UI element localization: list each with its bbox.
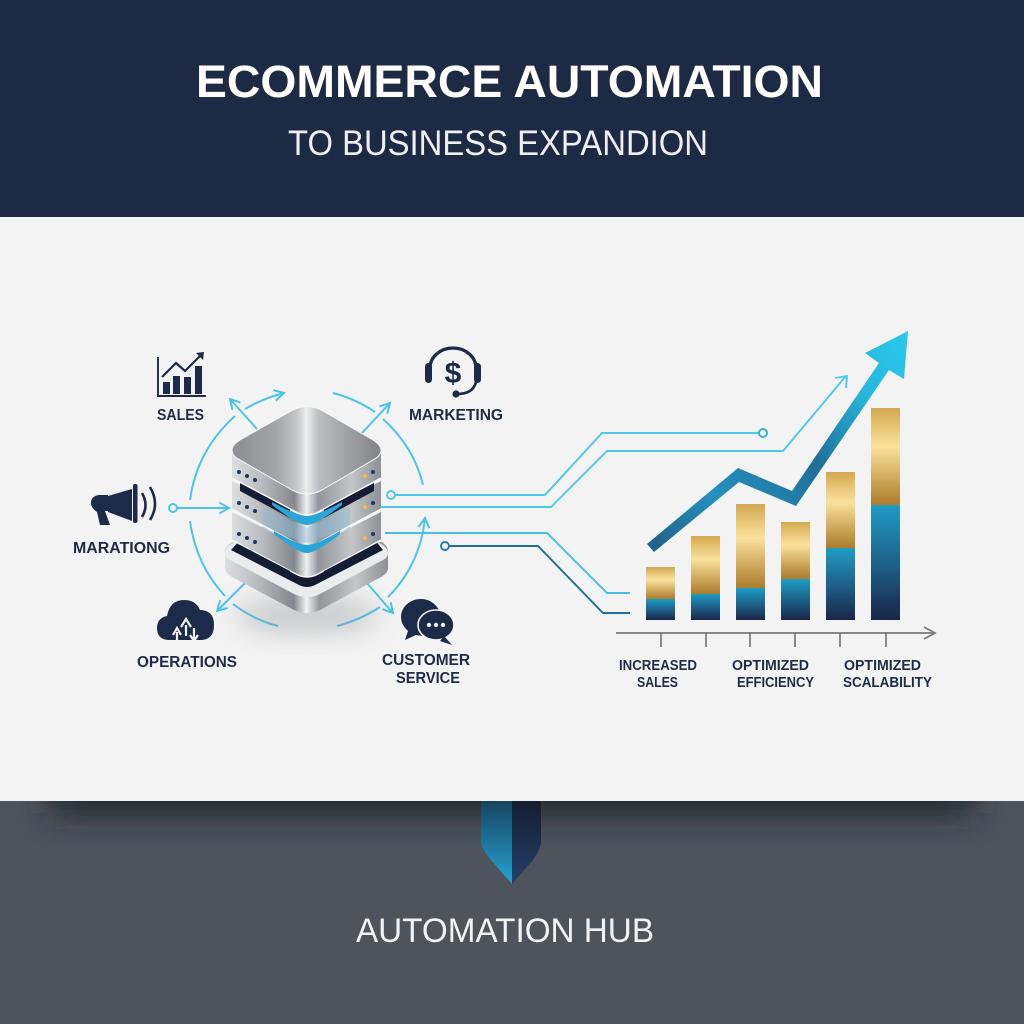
bar 4 (781, 522, 810, 620)
icon: shield pointer (481, 801, 541, 884)
server shadow (235, 595, 379, 635)
label: sales: SALES (157, 407, 204, 424)
title: ECOMMERCE AUTOMATION (196, 56, 823, 107)
server layer 3 (232, 512, 381, 577)
label: marationg: MARATIONG (73, 540, 170, 557)
label: optimized efficiency: OPTIMIZED (732, 658, 809, 674)
label: optimized efficiency (732, 658, 814, 691)
icon: sales chart (158, 352, 206, 396)
panel: header banner (0, 0, 1024, 217)
label: increased sales: SALES (637, 675, 678, 691)
icon: server stack hub (225, 406, 388, 613)
label: customer service (382, 652, 470, 687)
panel: footer band (0, 801, 1024, 1024)
icon: megaphone (91, 484, 155, 525)
panel: main background (0, 217, 1024, 801)
label: optimized efficiency: EFFICIENCY (737, 675, 814, 691)
label: operations: OPERATIONS (137, 654, 237, 671)
hub connector ring (169, 393, 425, 626)
bar 5 (826, 472, 855, 620)
server layer 1 (232, 450, 381, 525)
bar 3 (736, 504, 765, 620)
label: increased sales (619, 658, 697, 691)
connector lines from hub to chart (380, 376, 847, 613)
bar 2 (691, 536, 720, 620)
label: increased sales: INCREASED (619, 658, 697, 674)
label: optimized scalability: SCALABILITY (843, 675, 932, 691)
server layer 2 (232, 481, 381, 580)
label: customer service: SERVICE (396, 670, 460, 687)
label: marketing: MARKETING (409, 407, 503, 424)
bar 6 (871, 408, 900, 620)
icon: chat bubbles (401, 599, 454, 645)
icon: headset with dollar: $ (445, 357, 462, 390)
label: optimized scalability: OPTIMIZED (844, 658, 921, 674)
server base (225, 505, 388, 613)
subtitle: TO BUSINESS EXPANDION (288, 123, 708, 163)
icon: headset with dollar (425, 348, 481, 398)
bar chart (616, 408, 935, 647)
x axis (616, 627, 935, 647)
label: optimized scalability (843, 658, 932, 691)
icon: growth arrow (647, 331, 908, 552)
label: customer service: CUSTOMER (382, 652, 470, 669)
icon: cloud with arrows (157, 600, 214, 641)
bar 1 (646, 567, 675, 620)
server top face (232, 406, 381, 494)
footer label: AUTOMATION HUB (356, 912, 654, 950)
